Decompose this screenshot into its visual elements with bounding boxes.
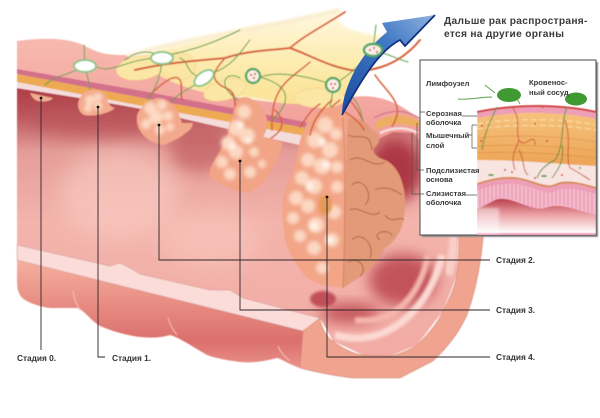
tumour: stage 4	[282, 107, 405, 288]
inset labels: оболочка	[426, 198, 462, 207]
stage labels: Стадия 3.	[496, 305, 535, 315]
inset labels	[426, 78, 569, 207]
tumour: stage 1	[78, 90, 115, 116]
vessels in fat	[135, 12, 420, 148]
inset labels: Подслизистая	[426, 166, 479, 175]
inset labels: Кровенос-	[529, 78, 568, 87]
stage labels	[17, 255, 535, 363]
lymph vessels	[45, 25, 408, 128]
stage labels: Стадия 0.	[17, 353, 56, 363]
layered tissue section	[477, 105, 596, 240]
inset labels: Мышечный	[426, 131, 470, 140]
illustration: colon cross-section	[17, 10, 484, 378]
tumour: stage 2	[137, 98, 193, 145]
inset labels: Лимфоузел	[426, 79, 470, 88]
fat lobes on wall	[115, 52, 346, 108]
bowel lumen	[17, 88, 458, 356]
panel: wall layers inset	[412, 60, 598, 240]
heading: spreading note: ется на другие органы	[444, 29, 564, 40]
inset leader lines	[412, 112, 477, 195]
lobed outer wall	[17, 260, 303, 368]
mesenteric fat	[112, 10, 395, 113]
lymph node over arrow	[364, 44, 382, 56]
stage labels: Стадия 2.	[496, 255, 535, 265]
inset labels: Серозная	[426, 109, 462, 118]
tumour: stage 3	[210, 97, 283, 193]
tumour: stage 0	[30, 93, 53, 102]
inset labels: основа	[426, 175, 454, 184]
inset labels: Слизистая	[426, 189, 466, 198]
inset: blood vessel	[565, 92, 587, 106]
inset labels: ный сосуд	[529, 88, 569, 97]
heading: spreading note: Дальше рак распространя-	[444, 16, 588, 27]
stage labels: Стадия 1.	[112, 353, 151, 363]
cut end ring	[300, 225, 484, 378]
light band	[17, 245, 320, 331]
stage labels: Стадия 4.	[496, 352, 535, 362]
lymph nodes	[74, 52, 340, 92]
inset labels: слой	[426, 141, 445, 150]
inset: lymph node	[458, 85, 521, 104]
vessels over tumours	[300, 100, 364, 135]
inset labels: оболочка	[426, 118, 462, 127]
wall layers band	[17, 69, 422, 150]
arrow: spread to other organs	[342, 15, 435, 115]
outer wall top	[17, 39, 425, 150]
stage leader lines	[40, 97, 490, 357]
